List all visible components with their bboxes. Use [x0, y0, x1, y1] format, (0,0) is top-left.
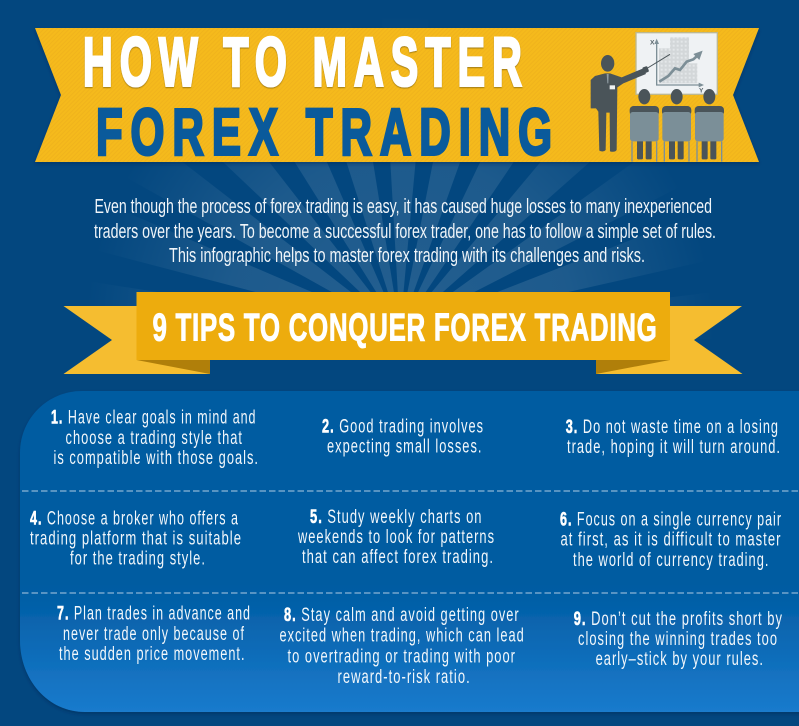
tip 5: weekends to look for patterns — [297, 527, 495, 548]
panel background — [20, 391, 799, 712]
tip 4: for the trading style. — [70, 548, 206, 570]
ribbon band — [136, 292, 670, 360]
ribbon left tail — [64, 306, 210, 374]
tip 7 — [57, 603, 251, 665]
presentation board — [636, 33, 717, 95]
tip 1: is compatible with those goals. — [54, 448, 259, 469]
title line 2: FOREX TRADING — [96, 94, 560, 168]
tip 2 — [322, 416, 484, 458]
ribbon right fold — [596, 360, 670, 374]
tip 7: the sudden price movement. — [59, 644, 246, 665]
banner shape — [35, 28, 759, 162]
audience — [630, 89, 724, 162]
ribbon right tail — [596, 306, 742, 374]
tip 4 — [30, 508, 242, 570]
tip 4: trading platform that is suitable — [30, 528, 242, 550]
tip 5: 5. Study weekly charts on — [310, 507, 482, 528]
tip 8: excited when trading, which can lead — [280, 626, 525, 647]
tip 9 — [574, 609, 783, 670]
tip 1: 1. Have clear goals in mind and — [51, 408, 256, 428]
tip 2: expecting small losses. — [327, 437, 482, 458]
presentation board: Y — [699, 88, 704, 95]
tip 6 — [560, 510, 782, 571]
tip 8: reward-to-risk ratio. — [338, 667, 471, 688]
tip 5: that can affect forex trading. — [302, 547, 494, 568]
icon: presenter with audience and chart — [591, 33, 724, 162]
tip 4: 4. Choose a broker who offers a — [30, 508, 239, 530]
presentation board: X — [650, 40, 655, 47]
presenter — [591, 54, 670, 152]
intro text — [94, 196, 716, 267]
tip 1 — [51, 408, 259, 469]
ribbon: 9 tips heading — [64, 292, 742, 374]
sunburst rays — [0, 0, 799, 360]
tip 2: 2. Good trading involves — [322, 416, 484, 438]
tip 7: never trade only because of — [63, 624, 245, 645]
tip 1: choose a trading style that — [66, 428, 243, 449]
tip 8 — [280, 605, 525, 688]
tip 8: 8. Stay calm and avoid getting over — [284, 605, 520, 626]
tip 7: 7. Plan trades in advance and — [57, 603, 251, 624]
title banner — [35, 24, 759, 168]
tip 3 — [566, 417, 781, 458]
panel: tips — [20, 391, 799, 712]
ribbon left fold — [136, 360, 210, 374]
tip 5 — [297, 507, 495, 568]
tip 8: to overtrading or trading with poor — [288, 647, 516, 668]
